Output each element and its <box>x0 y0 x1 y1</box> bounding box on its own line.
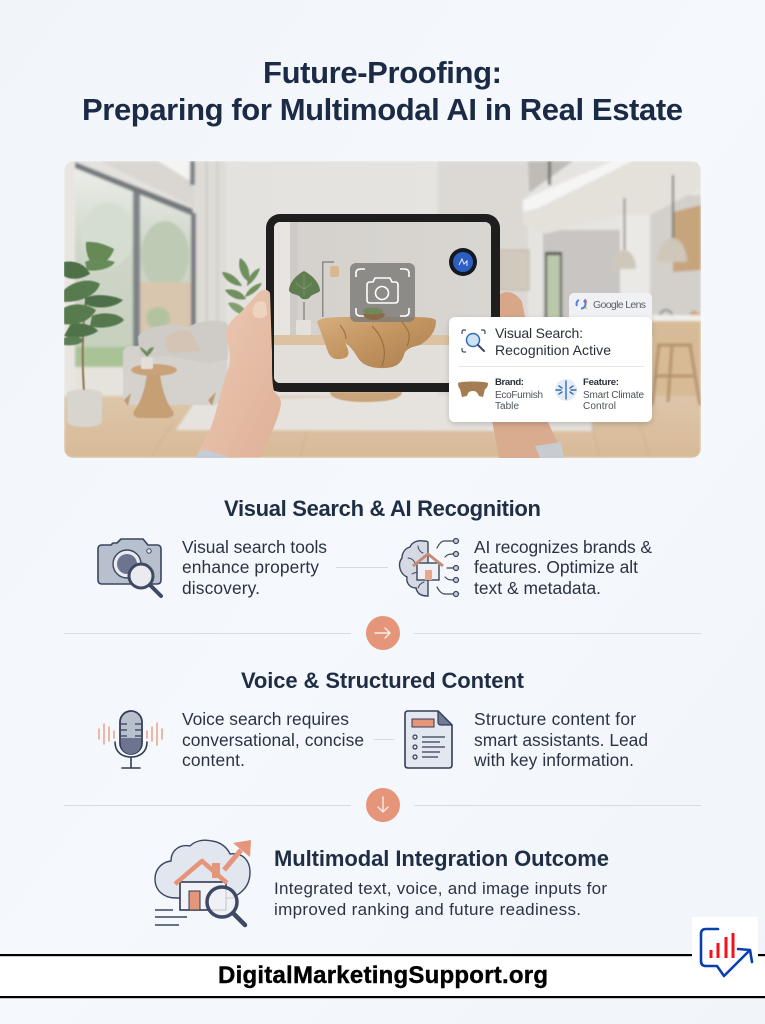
feature thumbnail <box>555 379 577 401</box>
visual search card: Visual Search: <box>495 325 583 341</box>
visual search card: Smart Climate <box>583 390 644 401</box>
text: AI recognizes brands: AI recognizes brands & <box>474 537 652 557</box>
icon: structured document <box>405 711 452 768</box>
table thumbnail <box>458 382 488 397</box>
text: integrated inputs <box>274 879 607 919</box>
right hand behind tablet <box>492 292 564 458</box>
visual search card: Table <box>495 401 519 412</box>
table base under tablet <box>330 392 402 402</box>
text: visual search tools: Visual search tools <box>182 537 327 557</box>
section heading: voice: Voice & Structured Content <box>241 668 525 693</box>
title: Preparing for Multimodal AI in Real Estate <box>82 92 683 127</box>
text: visual search tools <box>182 537 327 598</box>
text: structure content: smart assistants. Lead <box>474 730 648 750</box>
left hand holding tablet <box>195 290 281 458</box>
visual search card: Brand: <box>495 377 524 388</box>
title: Future-Proofing: <box>263 55 502 90</box>
text: AI recognizes brands: features. Optimize alt <box>474 557 638 577</box>
icon: brain with house and nodes <box>400 538 458 596</box>
icon: microphone with sound waves <box>99 711 162 768</box>
icon: camera with magnifier <box>98 539 161 596</box>
text: integrated inputs: Integrated text, voice, and image inputs for <box>274 879 607 898</box>
section heading: visual search: Visual Search & AI Recognition <box>224 496 541 521</box>
icon: cloud, house, growth arrow and magnifier <box>155 840 251 925</box>
text: structure content <box>473 709 648 770</box>
footer band: DigitalMarketingSupport.org <box>218 962 548 989</box>
visual search card: Recognition Active <box>495 342 611 358</box>
text: structure content: Structure content for <box>474 709 636 729</box>
title <box>82 55 683 127</box>
left background furniture and plants <box>64 242 262 427</box>
Google Lens tab <box>569 293 652 322</box>
section heading: outcome: Multimodal Integration Outcome <box>274 846 609 871</box>
arrow: right <box>366 616 400 650</box>
camera reticle <box>350 263 415 322</box>
text: AI recognizes brands: text & metadata. <box>474 578 601 598</box>
tablet screen scene <box>274 222 449 383</box>
text: voice search: content. <box>182 750 245 770</box>
Google Lens tab: Google Lens <box>593 299 646 311</box>
text: integrated inputs: improved ranking and future readiness. <box>274 900 581 919</box>
logo <box>692 917 758 995</box>
text: voice search: Voice search requires <box>182 709 349 729</box>
tablet <box>266 214 500 392</box>
text: voice search: conversational, concise <box>182 730 364 750</box>
arrow: down <box>366 788 400 822</box>
text: visual search tools: enhance property <box>182 557 319 577</box>
text: AI recognizes brands <box>474 537 652 598</box>
hero image: tablet scanning a living room <box>64 161 701 458</box>
room background <box>64 161 701 458</box>
visual search card: EcoFurnish <box>495 390 543 401</box>
text: voice search <box>182 709 364 770</box>
text: structure content: with key information. <box>473 750 634 770</box>
smart thermostat <box>449 248 477 276</box>
visual search card <box>449 317 652 422</box>
visual search card: Control <box>583 401 616 412</box>
text: visual search tools: discovery. <box>182 578 260 598</box>
visual search card: Feature: <box>583 377 619 388</box>
footer band <box>0 954 765 998</box>
search reticle icon <box>462 330 485 352</box>
